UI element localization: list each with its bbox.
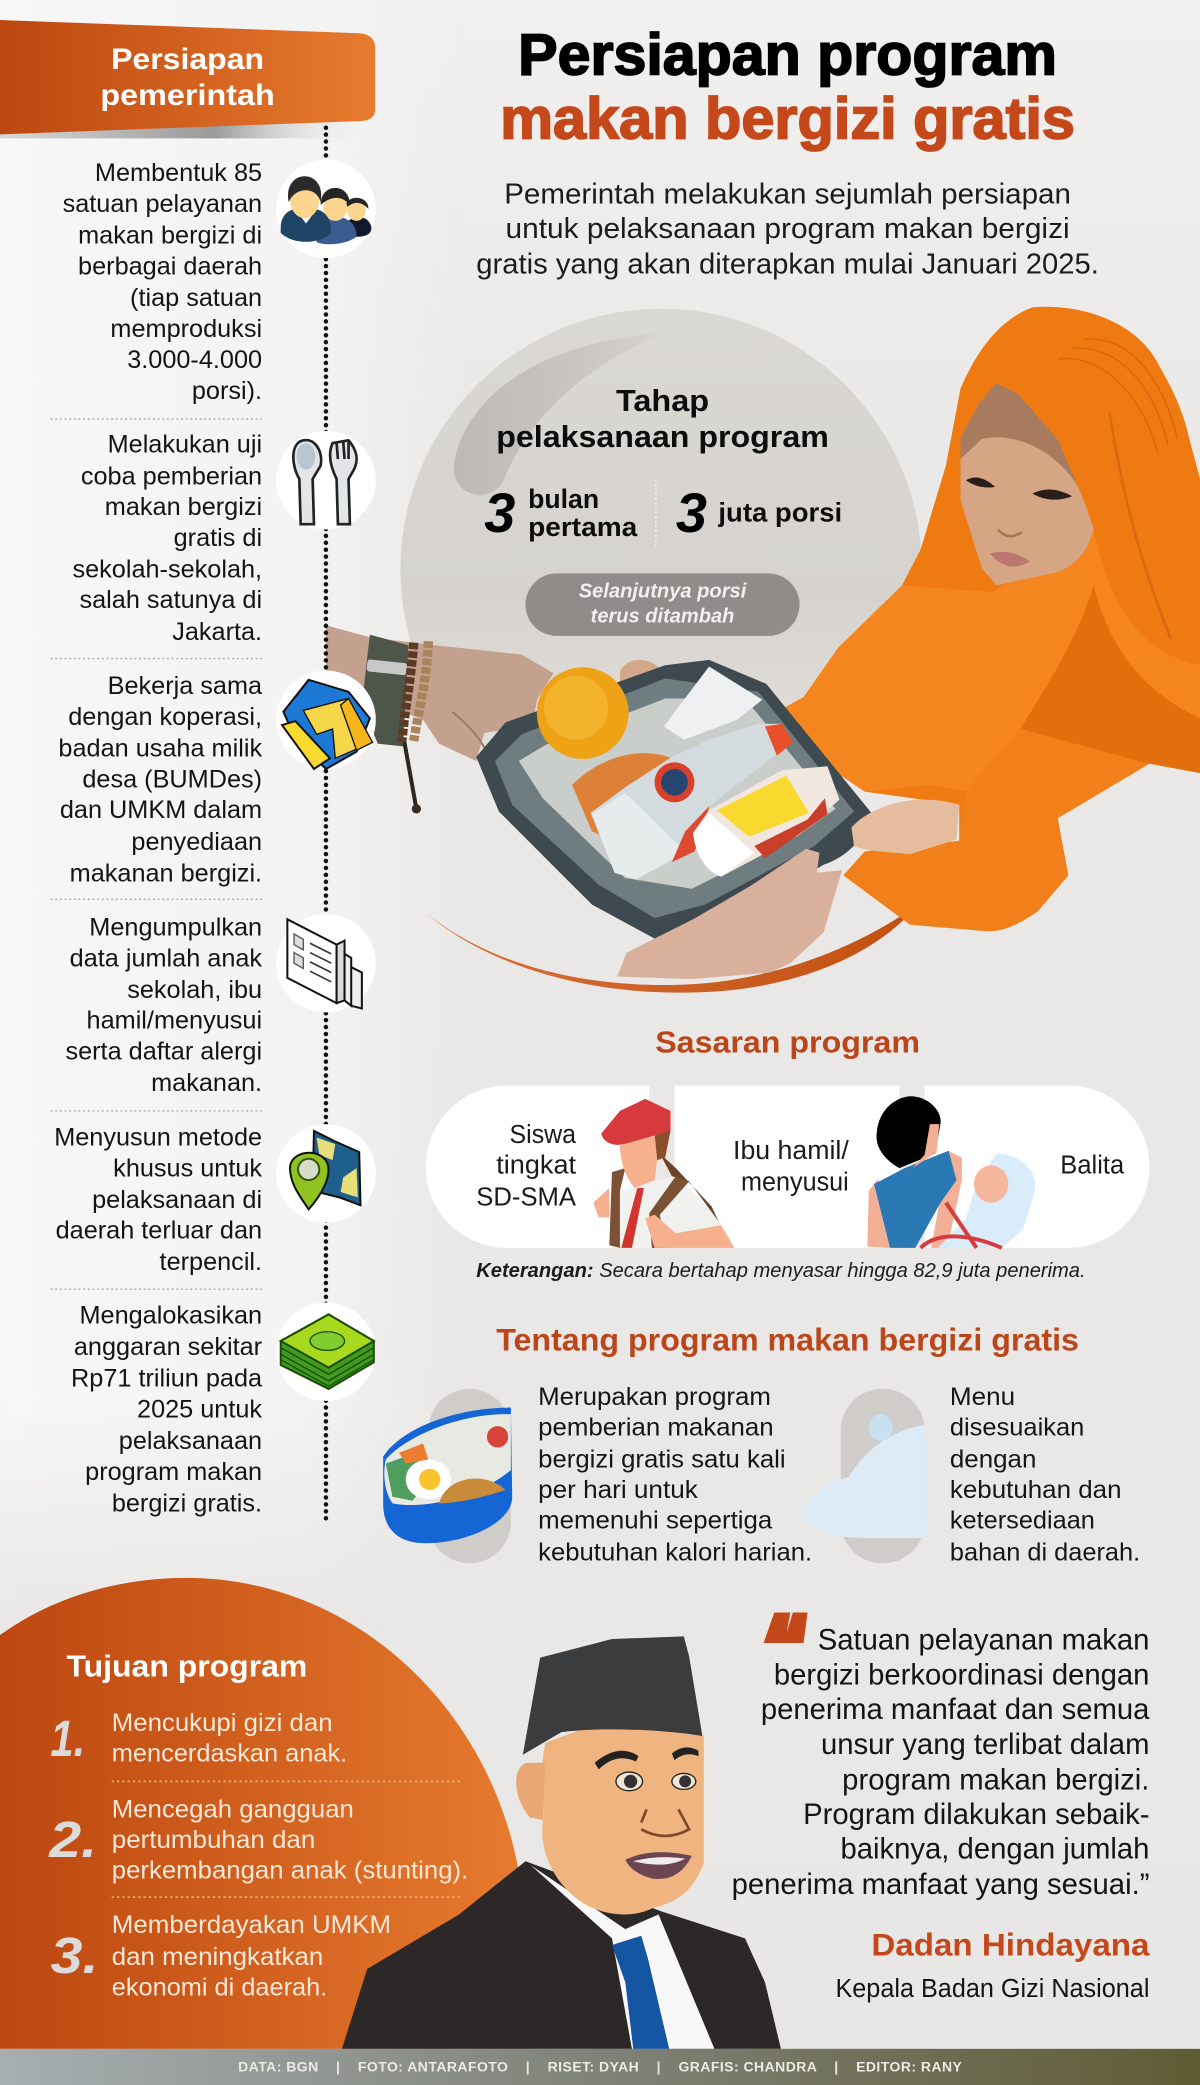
panel: program description: per hari untuk	[538, 1476, 698, 1504]
step 3: cooperatives partnership: makanan bergizi.	[70, 859, 262, 887]
goal 2	[48, 1795, 468, 1885]
step 6: budget allocation: pelaksanaan	[119, 1427, 262, 1455]
quote: unsur yang terlibat dalam	[821, 1729, 1149, 1761]
icon: spoon and fork	[276, 431, 376, 529]
quote	[732, 1612, 1150, 2003]
panel: government preparations heading band	[0, 20, 375, 138]
step 6: budget allocation: program makan	[85, 1458, 262, 1486]
panel: implementation stage: pelaksanaan program	[496, 420, 829, 454]
giver's lower hand	[617, 849, 842, 979]
icon: stack of money	[276, 1302, 376, 1401]
step 3: cooperatives partnership: penyediaan	[131, 828, 262, 856]
quote: Dadan Hindayana	[871, 1927, 1150, 1963]
panel: program targets: Siswa	[510, 1121, 577, 1149]
step 6: budget allocation: Rp71 triliun pada	[71, 1364, 263, 1392]
callout: portions keep increasing: terus ditambah	[591, 606, 734, 628]
panel: program targets: Balita	[1060, 1151, 1125, 1179]
goal 1: mencerdaskan anak.	[112, 1739, 347, 1767]
panel: program description: Merupakan program	[538, 1383, 771, 1411]
panel: program targets	[426, 1086, 1149, 1248]
goal 1	[51, 1709, 347, 1767]
dotted timeline	[324, 128, 328, 1521]
step 2: trial at schools: makan bergizi	[105, 493, 262, 521]
step 2: trial at schools: sekolah-sekolah,	[72, 555, 262, 583]
title: Persiapan program	[518, 23, 1057, 88]
goal 3: 3.	[51, 1927, 98, 1984]
step 5: remote area method: pelaksanaan di	[92, 1186, 262, 1214]
quote: penerima manfaat yang sesuai.”	[732, 1869, 1149, 1901]
step 1: form service units: (tiap satuan	[130, 284, 262, 312]
orange arc under the photo	[426, 905, 918, 993]
panel: program description: dengan	[950, 1445, 1036, 1473]
step 6: budget allocation: anggaran sekitar	[74, 1333, 262, 1361]
panel: implementation stage: 3	[676, 481, 707, 544]
quote: penerima manfaat dan semua	[761, 1694, 1150, 1726]
goal 2: perkembangan anak (stunting).	[112, 1857, 468, 1885]
panel: government preparations heading band: pemerintah	[100, 80, 275, 112]
panel: program description: pemberian makanan	[538, 1413, 774, 1441]
step 5: remote area method: terpencil.	[160, 1248, 262, 1276]
panel: program goals	[0, 1578, 527, 2049]
goal 3: dan meningkatkan	[112, 1943, 323, 1971]
step 2: trial at schools: gratis di	[174, 524, 262, 552]
panel: program description: kebutuhan kalori harian.	[538, 1539, 812, 1567]
giver's left arm, watch and bracelets	[326, 625, 553, 814]
step 1: form service units: Membentuk 85	[95, 159, 262, 187]
heading: program targets: Sasaran program	[655, 1025, 920, 1059]
yellow drink bottle	[693, 766, 839, 877]
note: Keterangan: Secara bertahap menyasar hingga 82,9 juta penerima.	[476, 1260, 1086, 1282]
step 1: form service units: memproduksi	[110, 315, 262, 343]
goal 2: Mencegah gangguan	[112, 1795, 354, 1823]
panel: program description: disesuaikan	[950, 1413, 1084, 1441]
heading: about the program: Tentang program makan bergizi gratis	[496, 1321, 1079, 1357]
step 4: collect data: serta daftar alergi	[65, 1038, 262, 1066]
goal 2: 2.	[48, 1811, 97, 1868]
panel: program goals: Tujuan program	[67, 1649, 307, 1683]
icon: data documents	[276, 914, 376, 1012]
icon: food cloche	[805, 1389, 925, 1563]
step 3: cooperatives partnership: dan UMKM dalam	[60, 796, 262, 824]
icon: quotation mark	[764, 1612, 808, 1643]
panel: program description: Menu	[950, 1383, 1015, 1411]
icon: student	[593, 1099, 734, 1248]
panel: program targets: SD-SMA	[476, 1183, 577, 1211]
panel: program description: kebutuhan dan	[950, 1476, 1122, 1504]
goal 3: ekonomi di daerah.	[112, 1974, 327, 2002]
step 3: cooperatives partnership: Bekerja sama	[108, 672, 263, 700]
panel: program description: bahan di daerah.	[950, 1539, 1140, 1567]
goal 2: pertumbuhan dan	[112, 1826, 315, 1854]
water bottle	[591, 724, 793, 879]
title: makan bergizi gratis	[500, 86, 1075, 151]
panel: program description: bergizi gratis satu kali	[538, 1445, 786, 1473]
icon: map and pin	[276, 1124, 376, 1223]
quote: baiknya, dengan jumlah	[840, 1834, 1149, 1866]
icon: mother and baby	[867, 1096, 1035, 1248]
panel: implementation stage	[484, 384, 842, 636]
step 3: cooperatives partnership: badan usaha milik	[58, 734, 262, 762]
illustration: portrait of Dadan Hindayana	[342, 1636, 781, 2049]
panel: implementation stage: pertama	[528, 512, 637, 542]
icon: handshake	[276, 671, 376, 769]
title	[500, 23, 1075, 151]
girl's face	[961, 383, 1094, 585]
step 5: remote area method: khusus untuk	[113, 1155, 262, 1183]
step 6: budget allocation	[71, 1302, 376, 1517]
girl's headscarf and blouse	[762, 307, 1200, 931]
step 2: trial at schools	[72, 430, 376, 646]
step 2: trial at schools: coba pemberian	[81, 462, 262, 490]
step 1: form service units: satuan pelayanan	[63, 190, 262, 218]
step 5: remote area method: daerah terluar dan	[56, 1217, 262, 1245]
quote: program makan bergizi.	[842, 1764, 1149, 1796]
panel: government preparations heading band: Persiapan	[111, 44, 264, 76]
footer credits: DATA: BGN | FOTO: ANTARAFOTO | RISET: DYAH | GRAFIS: CHANDRA | EDITOR: RANY	[238, 2058, 963, 2074]
callout: portions keep increasing	[525, 573, 800, 636]
step 3: cooperatives partnership: desa (BUMDes)	[82, 766, 262, 794]
panel: program description: memenuhi sepertiga	[538, 1507, 773, 1535]
goal 1: 1.	[51, 1710, 85, 1767]
panel: program description: ketersediaan	[950, 1507, 1095, 1535]
goal 3	[51, 1911, 391, 2002]
step 4: collect data	[65, 913, 376, 1097]
icon: lunch box	[383, 1389, 512, 1563]
step 1: form service units: berbagai daerah	[78, 252, 262, 280]
intro text: untuk pelaksanaan program makan bergizi	[506, 213, 1070, 245]
step 1: form service units	[63, 159, 376, 405]
food tray	[476, 660, 871, 939]
step 3: cooperatives partnership: dengan koperasi,	[68, 703, 262, 731]
child's fingers	[620, 660, 661, 689]
panel: implementation stage: Tahap	[616, 384, 709, 418]
quote: Kepala Badan Gizi Nasional	[835, 1975, 1149, 2003]
footer credits	[0, 2049, 1200, 2085]
step 6: budget allocation: bergizi gratis.	[112, 1489, 262, 1517]
step 4: collect data: Mengumpulkan	[89, 913, 262, 941]
goal 1: Mencukupi gizi dan	[112, 1709, 333, 1737]
panel: program targets: Ibu hamil/	[733, 1137, 850, 1165]
photo: hands passing a food tray to a girl in orange	[326, 307, 1200, 993]
panel: program description	[383, 1383, 1140, 1567]
goal 3: Memberdayakan UMKM	[112, 1911, 391, 1939]
step 2: trial at schools: Melakukan uji	[108, 430, 262, 458]
step 3: cooperatives partnership	[58, 671, 376, 887]
step 4: collect data: sekolah, ibu	[127, 976, 262, 1004]
step 2: trial at schools: salah satunya di	[79, 586, 262, 614]
panel: implementation stage: juta porsi	[717, 498, 842, 528]
step 6: budget allocation: Mengalokasikan	[79, 1302, 262, 1330]
step 1: form service units: 3.000-4.000	[127, 346, 262, 374]
intro text: gratis yang akan diterapkan mulai Januari 2025.	[476, 248, 1099, 280]
step 1: form service units: makan bergizi di	[78, 221, 262, 249]
step 4: collect data: hamil/menyusui	[87, 1006, 262, 1034]
quote: bergizi berkoordinasi dengan	[774, 1659, 1149, 1691]
intro text	[476, 179, 1099, 280]
step 1: form service units: porsi).	[192, 377, 262, 405]
step 5: remote area method	[54, 1123, 376, 1276]
panel: implementation stage: bulan	[528, 484, 599, 514]
step 5: remote area method: Menyusun metode	[54, 1123, 262, 1151]
step 6: budget allocation: 2025 untuk	[137, 1396, 262, 1424]
child's right hand	[851, 800, 959, 854]
big grey circle behind stage panel	[400, 309, 922, 830]
intro text: Pemerintah melakukan sejumlah persiapan	[504, 179, 1071, 211]
quote: Satuan pelayanan makan	[818, 1625, 1149, 1657]
panel: implementation stage: 3	[484, 481, 515, 544]
panel: program targets: menyusui	[741, 1169, 849, 1197]
icon: group of people	[276, 160, 376, 258]
panel: program targets: tingkat	[496, 1151, 577, 1179]
quote: Program dilakukan sebaik-	[803, 1799, 1149, 1831]
callout: portions keep increasing: Selanjutnya porsi	[579, 580, 747, 602]
step 4: collect data: data jumlah anak	[70, 945, 262, 973]
step 4: collect data: makanan.	[151, 1069, 262, 1097]
step 2: trial at schools: Jakarta.	[172, 618, 262, 646]
